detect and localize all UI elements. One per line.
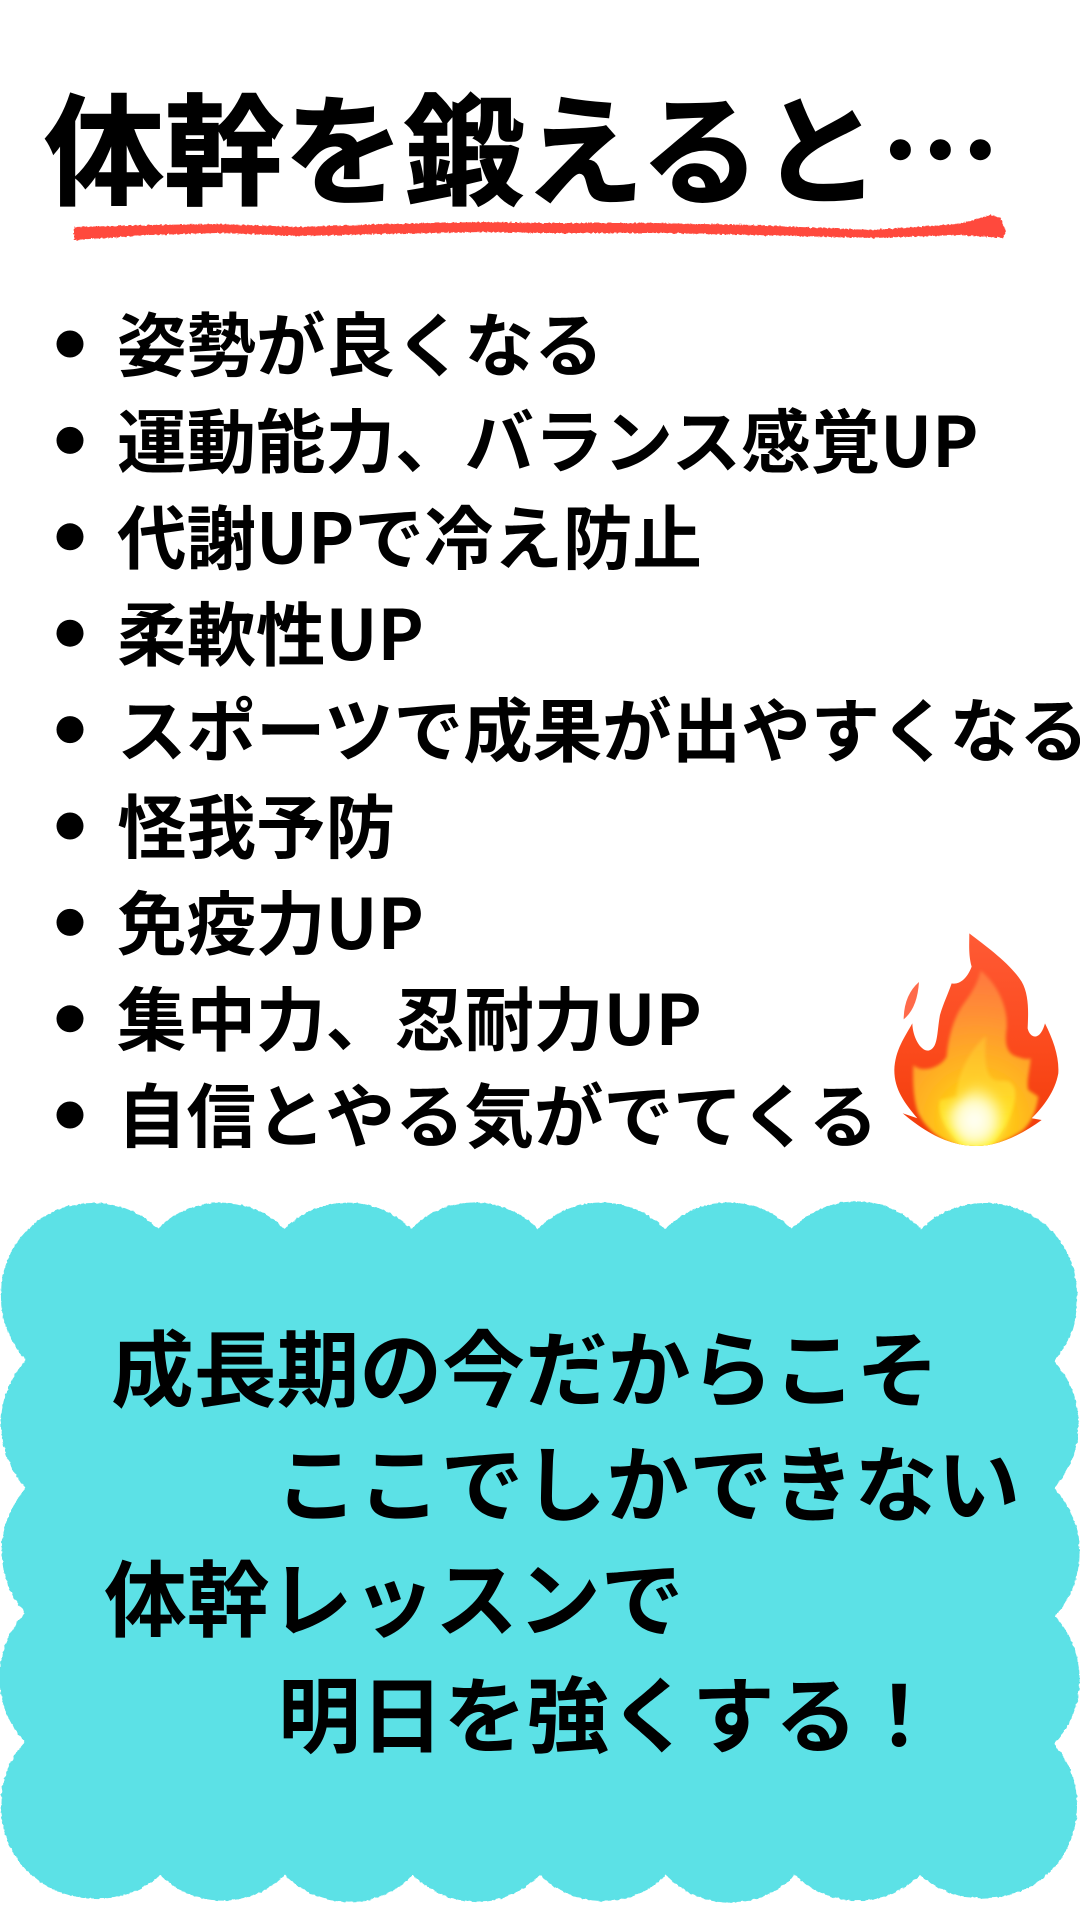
panel: turquoise cloud message [0,1201,1080,1903]
red brush underline [74,215,1006,240]
cloud shape [0,1201,1080,1903]
item: motor skills: 運動能力、バランス感覚UP [117,387,978,488]
item: confidence: 自信とやる気がでてくる [117,1062,878,1162]
message line 3: 体幹レッスンで [104,1534,684,1654]
item: sports results: スポーツで成果が出やすくなる [117,676,1080,777]
item: posture: 姿勢が良くなる [117,290,604,392]
message line 2: ここでしかできない [275,1419,1020,1539]
item: metabolism: 代謝UPで冷え防止 [117,484,702,584]
item: injury prevention: 怪我予防 [117,772,395,874]
icon: fire [894,933,1058,1148]
item: flexibility: 柔軟性UP [117,580,424,681]
item: focus: 集中力、忍耐力UP [117,965,702,1066]
item: immunity: 免疫力UP [117,869,424,970]
message line 1: 成長期の今だからこそ [111,1304,939,1424]
message line 4: 明日を強くする！ [278,1650,940,1770]
title: 体幹を鍛えると… [44,56,1000,230]
benefits list [56,290,1080,1162]
